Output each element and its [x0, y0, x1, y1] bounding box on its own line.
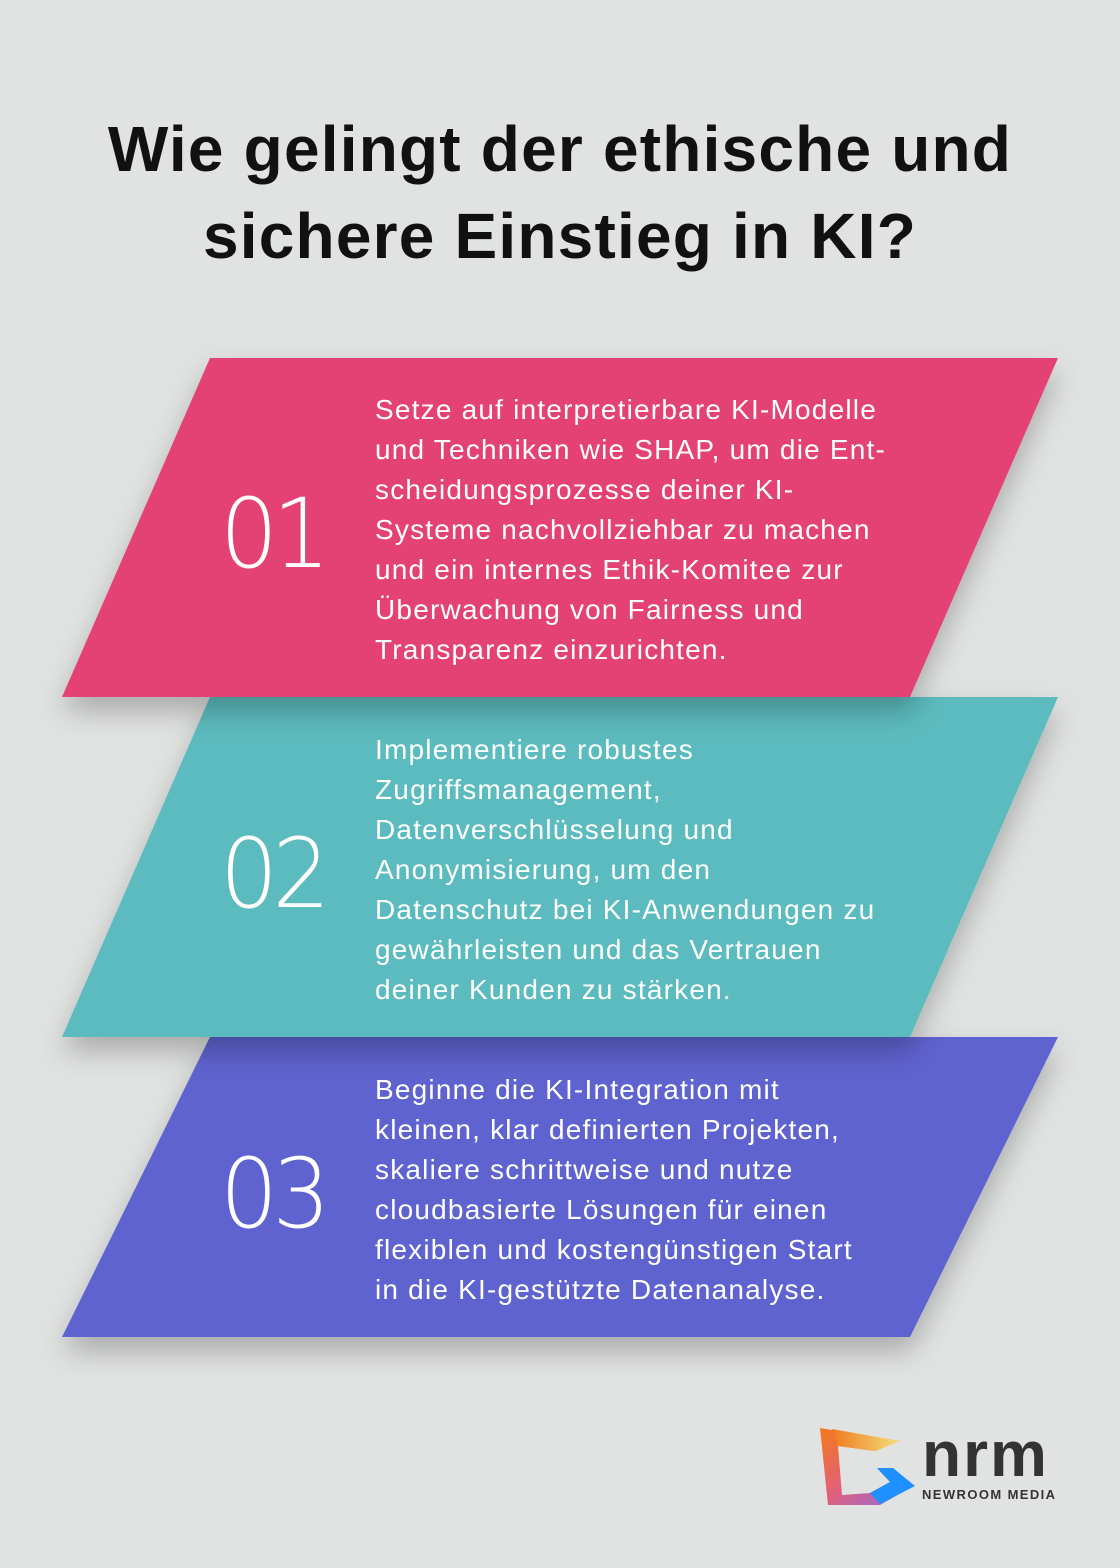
panel 1 text: und Techniken wie SHAP, um die Ent-	[375, 434, 886, 465]
logo text: NEWROOM MEDIA	[922, 1487, 1056, 1502]
panel 3 text: cloudbasierte Lösungen für einen	[375, 1194, 827, 1225]
panel 1 text: Transparenz einzurichten.	[375, 634, 728, 665]
panel 2 shape	[62, 697, 1058, 1037]
panel 3 number: 03	[220, 1138, 325, 1250]
panel 1 text: Systeme nachvollziehbar zu machen	[375, 514, 871, 545]
panel 1 number: 01	[220, 478, 325, 590]
panel 1 text: Setze auf interpretierbare KI-Modelle	[375, 394, 877, 425]
panel 3 text: in die KI-gestützte Datenanalyse.	[375, 1274, 826, 1305]
panel 1 text: Überwachung von Fairness und	[375, 594, 804, 625]
title	[108, 113, 1012, 272]
panel 2 number: 02	[220, 818, 325, 930]
panel 2 text: deiner Kunden zu stärken.	[375, 974, 732, 1005]
panel 1 text: und ein internes Ethik-Komitee zur	[375, 554, 844, 585]
panel 3 text: Beginne die KI-Integration mit	[375, 1074, 780, 1105]
panel 1 text	[375, 394, 886, 665]
title: Wie gelingt der ethische und	[108, 113, 1012, 185]
panel 2 text: Zugriffsmanagement,	[375, 774, 662, 805]
panel 2 text: Implementiere robustes	[375, 734, 694, 765]
panel 2 text	[375, 734, 875, 1005]
panel 2 text: Datenverschlüsselung und	[375, 814, 734, 845]
panel 1 shape	[62, 358, 1058, 697]
panel 3 text: flexiblen und kostengünstigen Start	[375, 1234, 853, 1265]
title: sichere Einstieg in KI?	[203, 200, 917, 272]
icon: logo mark	[820, 1428, 915, 1505]
panel 2 text: Datenschutz bei KI-Anwendungen zu	[375, 894, 875, 925]
panel 2 text: gewährleisten und das Vertrauen	[375, 934, 822, 965]
panel 3 text: kleinen, klar definierten Projekten,	[375, 1114, 840, 1145]
panel 2 text: Anonymisierung, um den	[375, 854, 711, 885]
panel 3 shape	[62, 1037, 1058, 1337]
panel 3 text: skaliere schrittweise und nutze	[375, 1154, 794, 1185]
panel 3 text	[375, 1074, 853, 1305]
logo text: nrm	[922, 1418, 1049, 1490]
panel 1 text: scheidungsprozesse deiner KI-	[375, 474, 794, 505]
